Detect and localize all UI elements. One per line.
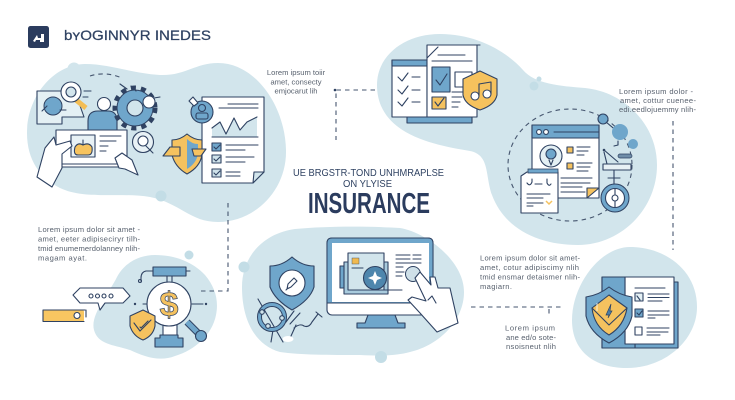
main title block: ON YLYISE	[343, 179, 392, 190]
icon: magnifier	[61, 82, 91, 108]
icon: hand tapping	[406, 266, 458, 332]
speech bubble	[73, 288, 130, 310]
illustration: monitor and shield	[258, 238, 458, 342]
text block: left	[38, 225, 140, 262]
dollar circle	[134, 282, 207, 326]
icon: shield with ribbon	[163, 134, 206, 174]
text block: top right: edi.eedlojuemmy nlih-	[619, 105, 696, 114]
magnifier base	[155, 325, 183, 347]
policy document	[602, 277, 678, 348]
map card	[37, 91, 84, 124]
icon: check shield	[130, 310, 155, 340]
text block: lower right: amet, cotur adipiscimy nlih	[480, 263, 579, 272]
text block: lower right	[480, 254, 580, 291]
form document	[407, 45, 480, 123]
text block: lower right: Lorem ipsum dolor sit amet-	[480, 254, 580, 262]
header title: bʏOGINNYR INEDES	[64, 27, 211, 43]
text block: left: Lorem ipsum dolor sit amet -	[38, 225, 140, 234]
icon: avatar badge	[189, 97, 213, 123]
network nodes	[598, 114, 638, 149]
text block: top right: Lorem ipsum dolor -	[619, 87, 693, 96]
screen text lines	[396, 255, 421, 276]
illustration: shield and policy document	[586, 277, 678, 348]
card with apple	[56, 130, 127, 167]
checklist panel	[392, 60, 427, 117]
magnifier handle	[187, 322, 206, 342]
text block: left: amet, eeter adipiseciryr tilh-	[38, 234, 140, 244]
dashed connectors	[198, 89, 673, 316]
text block: left: tmid enumemerdolanney nlih-	[38, 244, 140, 253]
dollar circle: $	[160, 286, 179, 324]
text block: top right	[619, 87, 696, 114]
illustration: dollar magnifier	[43, 267, 207, 347]
icon: small magnifier	[132, 132, 154, 153]
icon: lightning shield	[586, 287, 632, 343]
browser window	[532, 125, 599, 198]
icon: gear	[115, 84, 160, 128]
panel: bottom-left blob	[93, 250, 217, 359]
illustration: checklist forms with shield	[392, 45, 497, 123]
dashed arc	[90, 74, 122, 78]
wheel machine	[601, 149, 632, 212]
payment card stack	[340, 253, 402, 294]
icon: shield with notes	[463, 71, 497, 110]
icon: pencil shield	[270, 257, 314, 310]
text block: top centre: amet, consecty	[270, 78, 322, 86]
dashed orbit	[508, 109, 632, 221]
icon: hands	[37, 137, 138, 187]
text block: top centre: Lorem ipsum toiir	[267, 68, 326, 77]
report document	[202, 97, 264, 183]
text block: left: magam ayat.	[38, 254, 87, 262]
text block: bottom centre: Lorem ipsum	[505, 324, 555, 332]
main title block: UE BRGSTR-TOND UNHMRAPLSE	[293, 168, 444, 179]
illustration: research and person	[37, 74, 264, 187]
text block: top right: amet, cottur cuenee-	[620, 96, 696, 105]
icon: person	[88, 98, 117, 130]
text block: lower right: magiarn.	[480, 282, 512, 291]
main title block	[293, 168, 444, 220]
main title block: INSURANCE	[308, 188, 430, 220]
monitor	[327, 238, 433, 328]
text block: top centre: emjocarut lih	[274, 86, 318, 96]
logo badge	[28, 26, 49, 48]
yellow pill	[43, 310, 86, 322]
icon: ring and tools	[258, 299, 322, 342]
illustration: web page and wheel	[508, 109, 638, 221]
text block: lower right: tmid ensmar detaismer nlih-	[480, 272, 580, 282]
text block: bottom centre: ane ed/o sote-	[506, 333, 556, 342]
text block: bottom centre: nsoisneut nlih	[506, 342, 556, 351]
top bar	[138, 267, 190, 284]
text block: top centre	[267, 68, 326, 96]
panel: centre blob	[238, 227, 464, 363]
text block: bottom centre	[505, 324, 556, 351]
small document	[521, 169, 558, 213]
panel: top-right blob	[377, 34, 657, 245]
panel: bottom-right blob	[572, 247, 697, 368]
panel: top-left blob	[27, 62, 286, 222]
